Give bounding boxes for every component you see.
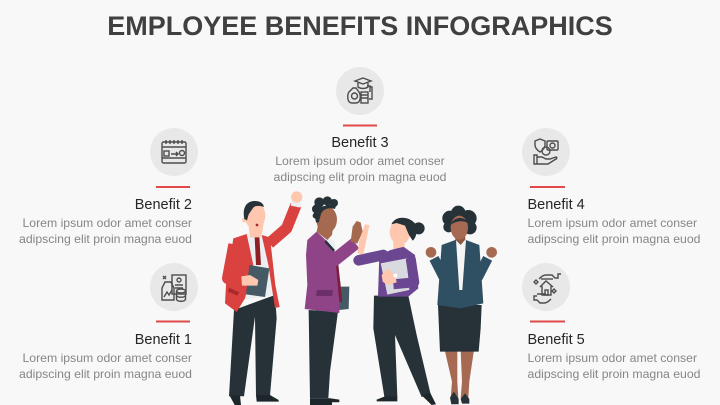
icon: benefit 2 calendar xyxy=(150,128,198,176)
figure: woman in navy blazer xyxy=(426,206,497,404)
icon: benefit 5 hands holding house xyxy=(522,263,570,311)
title: EMPLOYEE BENEFITS INFOGRAPHICS xyxy=(107,11,613,41)
text block: benefit 2: Lorem ipsum odor amet conser xyxy=(22,216,192,230)
accent line: benefit 3 xyxy=(343,124,377,126)
text block: benefit 5: Lorem ipsum odor amet conser xyxy=(528,351,697,365)
text block: benefit 4 xyxy=(528,197,700,246)
text block: benefit 5: Benefit 5 xyxy=(528,332,585,348)
accent line: benefit 1 xyxy=(156,320,190,322)
icon: benefit 4 hand with shield, coin, camera xyxy=(522,128,570,176)
text block: benefit 4: Lorem ipsum odor amet conser xyxy=(528,216,697,230)
text block: benefit 5 xyxy=(528,332,700,381)
icon: benefit 3 money and education xyxy=(336,67,384,115)
text block: benefit 2: adipscing elit proin magna euod xyxy=(19,232,192,246)
icon: benefit 1 documents and coins xyxy=(150,263,198,311)
text block: benefit 3: Benefit 3 xyxy=(331,135,389,151)
accent line: benefit 2 xyxy=(156,186,190,188)
figure: man in red jacket xyxy=(225,191,302,405)
figures group: four colleagues celebrating xyxy=(225,191,497,405)
figure: woman in purple top xyxy=(357,218,436,405)
text block: benefit 3: Lorem ipsum odor amet conser xyxy=(275,154,445,168)
text block: benefit 2: Benefit 2 xyxy=(135,197,192,213)
text block: benefit 2 xyxy=(19,197,192,246)
accent line: benefit 5 xyxy=(530,320,565,322)
text block: benefit 5: adipscing elit proin magna euod xyxy=(528,367,700,381)
text block: benefit 4: Benefit 4 xyxy=(528,197,585,213)
accent line: benefit 4 xyxy=(530,186,565,188)
text block: benefit 1: adipscing elit proin magna euod xyxy=(19,367,192,381)
text block: benefit 3: adipscing elit proin magna euod xyxy=(274,170,446,184)
text block: benefit 3 xyxy=(274,135,446,184)
text block: benefit 1: Benefit 1 xyxy=(135,332,192,348)
text block: benefit 1 xyxy=(19,332,192,381)
text block: benefit 1: Lorem ipsum odor amet conser xyxy=(22,351,192,365)
figure: man in purple jacket xyxy=(305,196,363,405)
text block: benefit 4: adipscing elit proin magna euod xyxy=(528,232,700,246)
